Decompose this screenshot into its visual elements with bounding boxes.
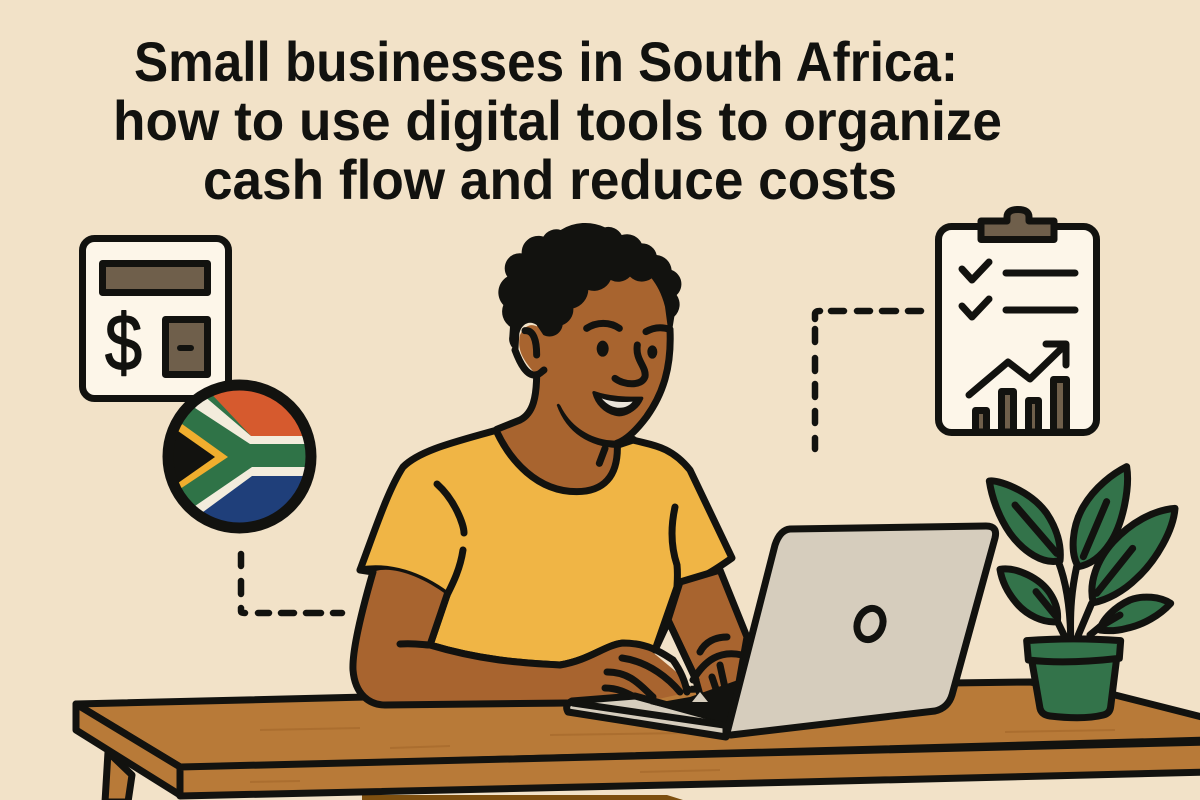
icon: South African flag [168, 385, 311, 530]
laptop lid [727, 526, 996, 735]
head and neck [497, 223, 681, 492]
title [113, 30, 1002, 211]
laptop logo [852, 604, 888, 644]
table [76, 682, 1200, 800]
person [353, 223, 747, 707]
gap between torso and arm [657, 625, 691, 687]
icon: calculator: $ [105, 298, 142, 387]
icon: calculator [82, 238, 228, 398]
title: cash flow and reduce costs [203, 148, 897, 211]
shirt [360, 430, 732, 665]
arm and hand outlines [353, 570, 742, 705]
face features [587, 323, 670, 384]
shirt seams [437, 484, 677, 595]
plant in pot [989, 467, 1175, 718]
laptop keyboard base [567, 696, 726, 737]
icon: clipboard with checklist and chart [938, 210, 1096, 432]
dashed connector: clipboard [815, 311, 921, 449]
right arm [668, 570, 747, 705]
left arm [353, 570, 690, 707]
title: how to use digital tools to organize [113, 89, 1002, 152]
title: Small businesses in South Africa: [134, 30, 958, 93]
hair [498, 223, 681, 352]
laptop [567, 526, 996, 737]
dashed connector: flag to person [241, 554, 342, 613]
hands on keyboard [650, 680, 738, 724]
